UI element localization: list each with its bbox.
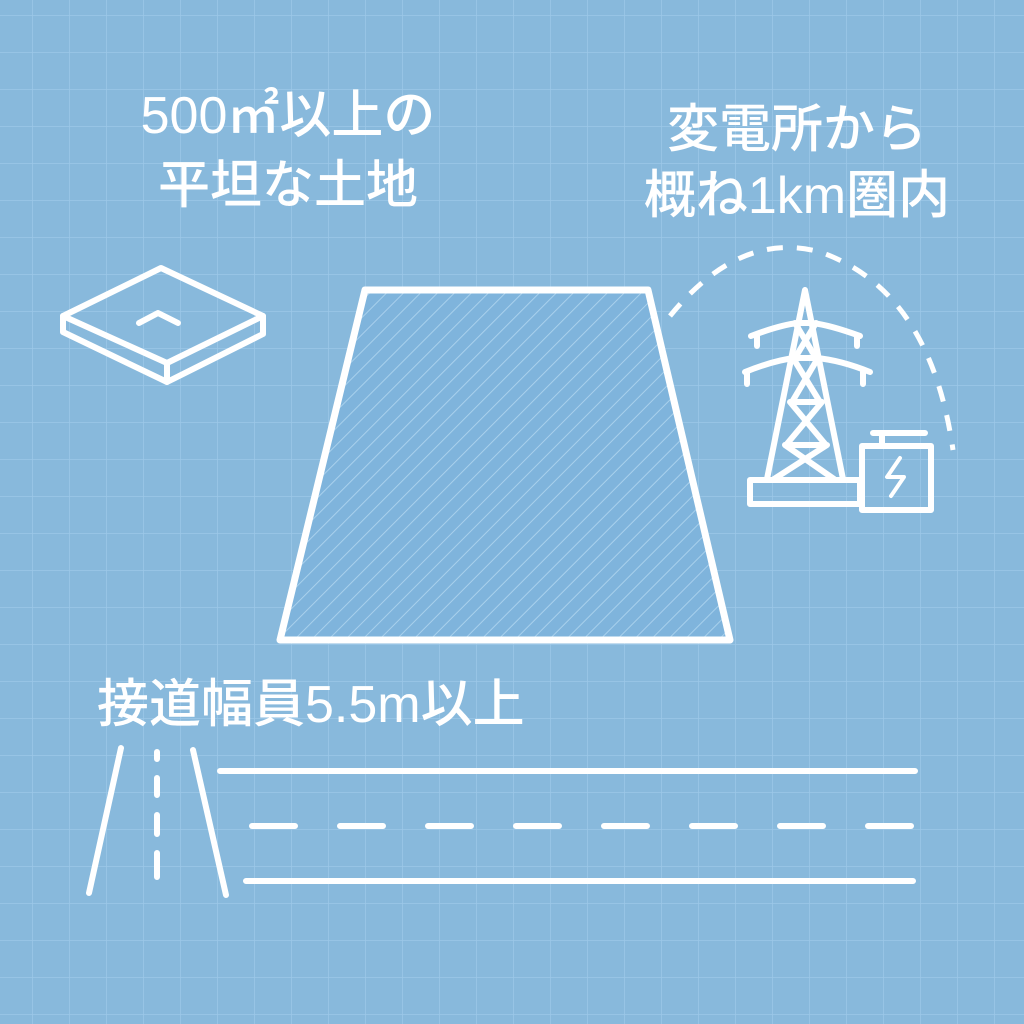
heading: land size: 500㎡以上の — [141, 87, 435, 145]
heading: substation distance: 変電所から — [667, 101, 927, 159]
icon: flat land platform — [63, 268, 263, 382]
dashed range arc — [670, 248, 953, 450]
heading: land size: 平坦な土地 — [158, 157, 418, 215]
heading: substation distance — [644, 101, 950, 225]
heading: substation distance: 概ね1km圏内 — [644, 167, 950, 225]
land plot — [280, 290, 730, 640]
icon: transmission tower and substation — [745, 290, 931, 510]
heading: land size — [141, 87, 435, 215]
heading: road width: 接道幅員5.5m以上 — [97, 676, 525, 734]
icon: road — [89, 748, 915, 895]
